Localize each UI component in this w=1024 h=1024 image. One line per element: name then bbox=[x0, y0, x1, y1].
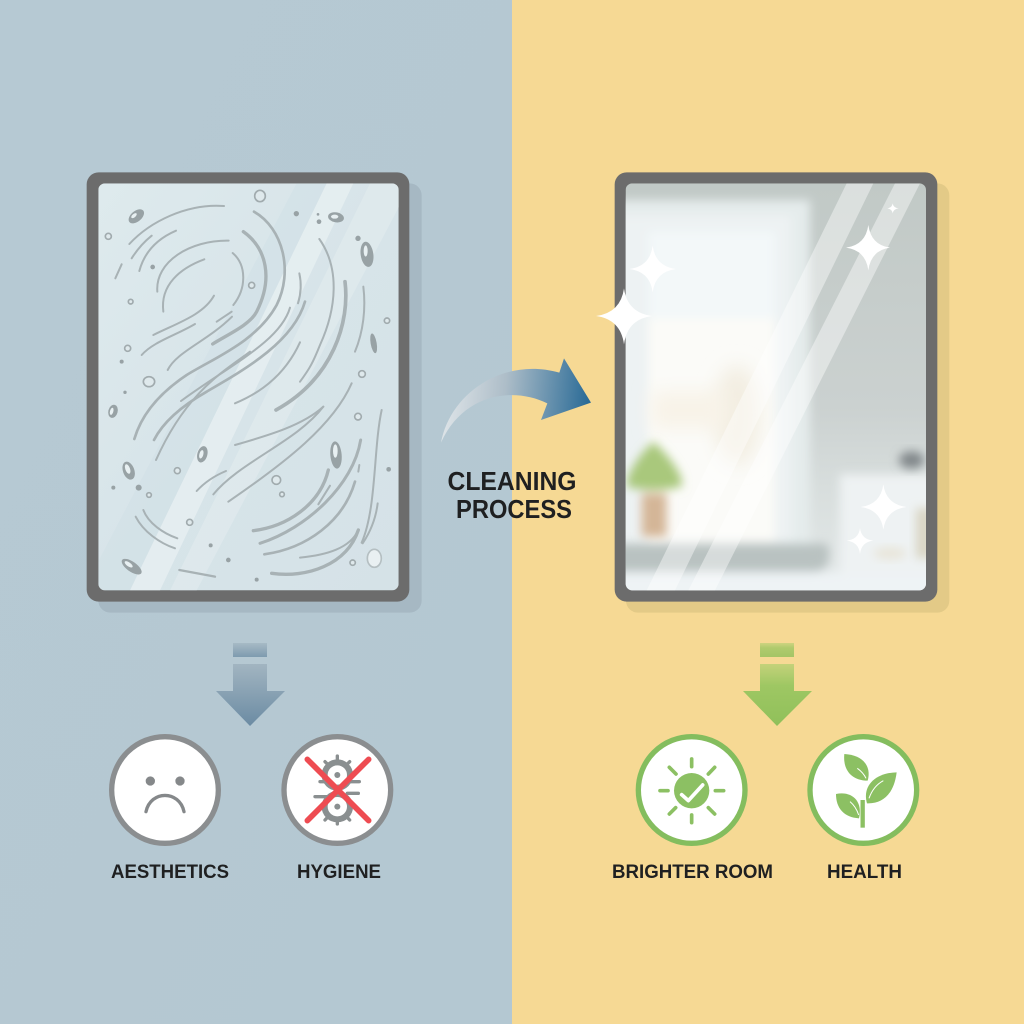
blurred room reflection bbox=[626, 183, 926, 590]
water droplets bbox=[105, 190, 390, 567]
label: cleaning process bbox=[448, 466, 576, 524]
clean mirror bbox=[596, 172, 949, 613]
blurred plant bbox=[627, 442, 682, 537]
streaks bbox=[115, 206, 382, 577]
dirty mirror bbox=[87, 172, 422, 613]
arrow: down blue bbox=[216, 643, 285, 726]
mirror shadow bbox=[626, 183, 949, 613]
mirror glass bbox=[98, 183, 400, 590]
label: cleaning process: PROCESS bbox=[456, 494, 572, 524]
background: right yellow panel bbox=[512, 0, 1024, 1024]
curved process arrow bbox=[441, 358, 591, 443]
icon: bright sun with check bbox=[638, 737, 745, 843]
arrow: down green bbox=[743, 643, 812, 726]
label: hygiene: HYGIENE bbox=[297, 861, 381, 883]
label: cleaning process: CLEANING bbox=[448, 466, 576, 496]
background: left blue panel bbox=[0, 0, 512, 1024]
label: brighter room: BRIGHTER ROOM bbox=[612, 861, 773, 883]
icon: sad face bbox=[112, 737, 218, 843]
sparkles bbox=[596, 203, 907, 554]
label: health: HEALTH bbox=[827, 861, 902, 883]
icon: leafy sprout bbox=[810, 737, 917, 843]
icon: crossed-out germ bbox=[284, 737, 391, 843]
mirror frame bbox=[615, 172, 937, 602]
mirror shadow bbox=[98, 183, 422, 613]
label: aesthetics: AESTHETICS bbox=[111, 861, 229, 883]
mirror frame bbox=[87, 172, 409, 602]
